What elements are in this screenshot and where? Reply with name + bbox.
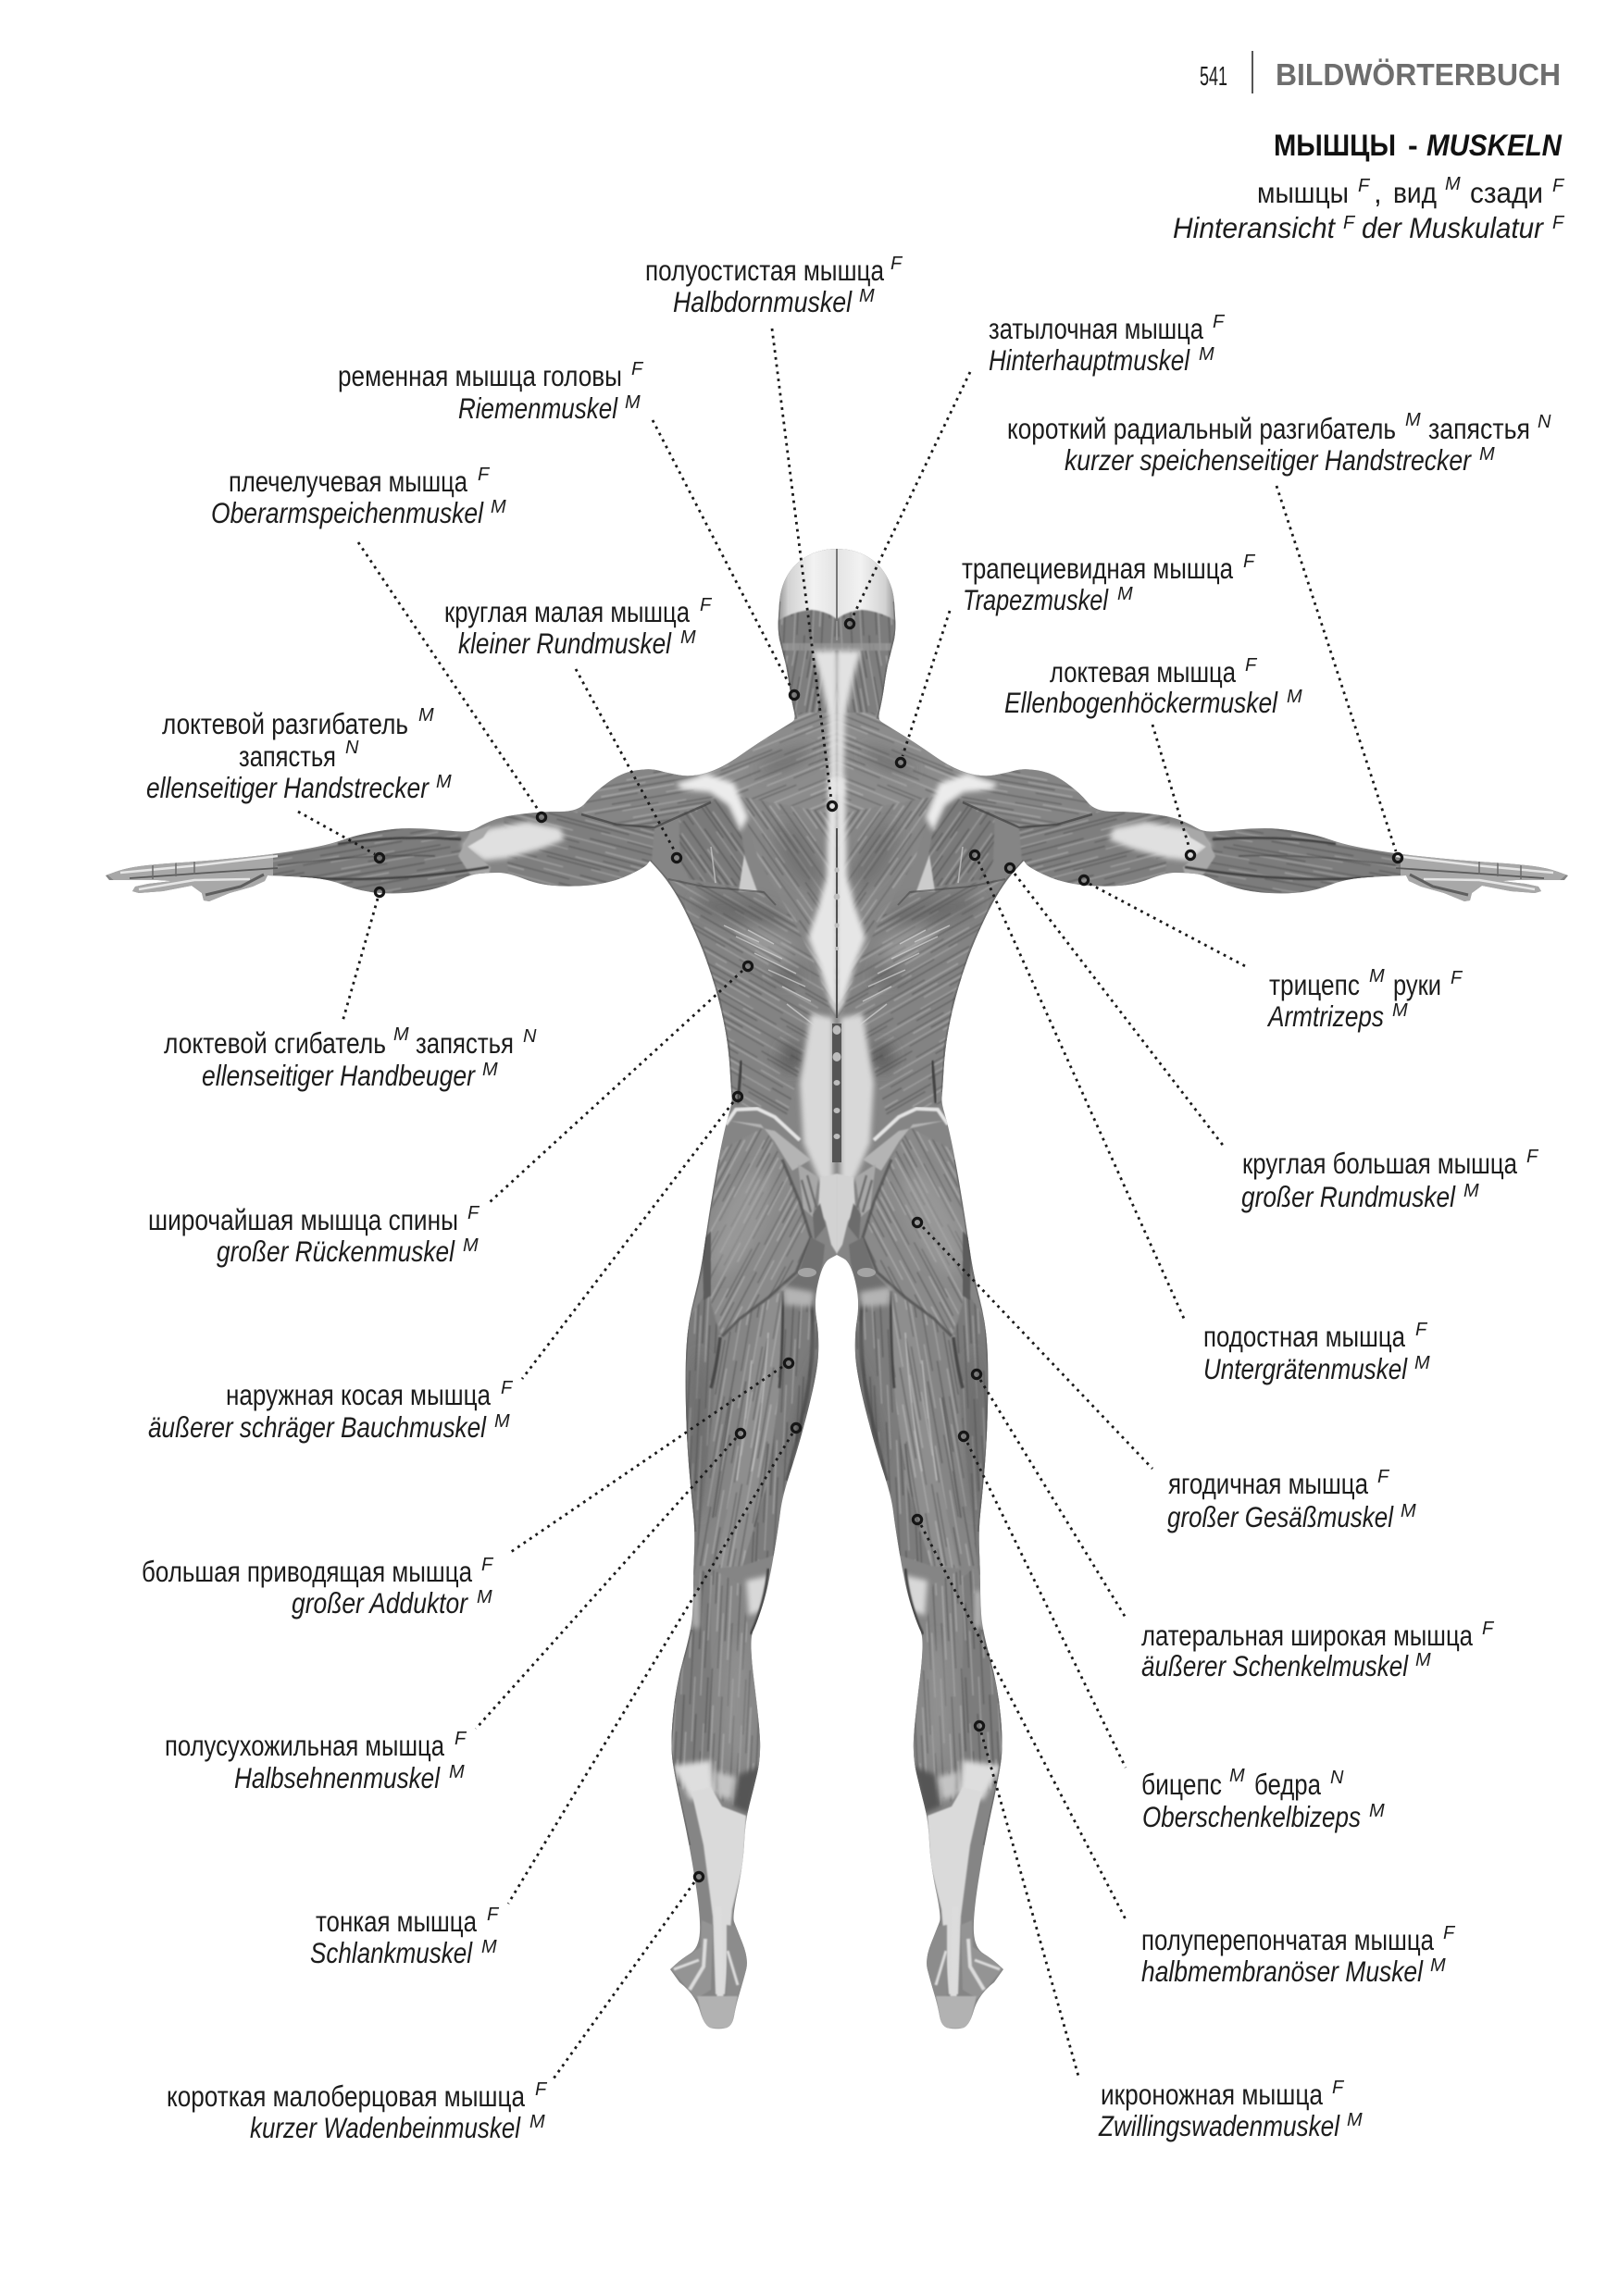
marker: трапециевидная мышца	[896, 758, 905, 767]
foot and ankle	[669, 1920, 713, 1999]
label: круглая большая мышца: großer Rundmuskel	[1241, 1180, 1456, 1213]
spine line	[836, 828, 838, 1018]
vastus lateralis	[685, 1291, 720, 1575]
header divider	[1252, 51, 1253, 93]
neck	[782, 651, 838, 743]
label: полуперепончатая мышца: F	[1443, 1923, 1456, 1943]
label: подостная мышца	[1203, 1320, 1430, 1385]
label: большая приводящая мышца: F	[481, 1555, 494, 1575]
label: ременная мышца головы: Riemenmuskel	[458, 391, 618, 425]
marker: локтевой сгибатель запястья	[375, 887, 384, 897]
label: круглая малая мышца: круглая малая мышца	[444, 595, 690, 628]
vertebral column	[832, 1024, 838, 1162]
pointer: тонкая мышца	[508, 1433, 792, 1904]
subtitle: ,	[1374, 176, 1382, 209]
label: локтевой сгибатель запястья: ellenseitiger Handbeuger	[202, 1059, 476, 1092]
subtitle: F	[1552, 213, 1565, 233]
label: локтевой разгибатель запястья: локтевой разгибатель	[162, 707, 408, 740]
hamstring origin highlight	[782, 1286, 814, 1307]
pointer: ременная мышца головы	[653, 420, 791, 689]
label: тонкая мышца: M	[481, 1937, 497, 1957]
label: наружная косая мышца: наружная косая мышца	[226, 1378, 491, 1411]
label: трицепс руки: M	[1369, 966, 1385, 987]
pointer: локтевой разгибатель запястья	[298, 812, 375, 854]
marker: короткий радиальный разгибатель	[1393, 853, 1402, 863]
label: локтевой сгибатель запястья: N	[523, 1026, 537, 1047]
pointer: наружная косая мышца	[522, 1102, 733, 1379]
pointer: короткая малоберцовая мышца	[554, 1882, 694, 2079]
label: латеральная широкая мышца	[1141, 1619, 1495, 1682]
label: ременная мышца головы: M	[625, 392, 641, 413]
calf outer head	[666, 1569, 711, 1795]
tonal shading	[691, 742, 832, 1768]
label: локтевой разгибатель запястья: ellenseitiger Handstrecker	[146, 771, 430, 804]
label: латеральная широкая мышца: латеральная широкая мышца	[1141, 1619, 1473, 1652]
label: икроножная мышца: икроножная мышца	[1101, 2078, 1323, 2111]
hand	[102, 851, 273, 903]
pointer: полуостистая мышца	[772, 329, 831, 800]
label: локтевая мышца: локтевая мышца	[1050, 655, 1236, 689]
head: occipital muscle band	[776, 610, 837, 651]
label: трапециевидная мышца: Trapezmuskel	[963, 583, 1109, 616]
label: короткий радиальный разгибатель запястья: M	[1405, 410, 1421, 430]
pointer: короткий радиальный разгибатель	[1277, 486, 1396, 851]
label: круглая малая мышца: M	[680, 627, 696, 648]
label: тонкая мышца: Schlankmuskel	[310, 1936, 473, 1969]
label: бицепс бедра: M	[1369, 1801, 1385, 1821]
label: тонкая мышца: тонкая мышца	[316, 1905, 477, 1938]
label: круглая малая мышца: kleiner Rundmuskel	[458, 627, 672, 660]
label: трицепс руки: F	[1451, 968, 1463, 988]
gluteal borders	[722, 1160, 811, 1336]
oblique groove	[738, 1061, 741, 1103]
semitendinosus	[715, 1290, 783, 1569]
latissimus dorsi	[666, 879, 830, 1115]
pointer: круглая малая мышца	[576, 669, 675, 851]
label: короткий радиальный разгибатель запястья: kurzer speichenseitiger Handstrecker	[1065, 443, 1472, 477]
subtitle: F	[1552, 176, 1565, 196]
label: ременная мышца головы: ременная мышца головы	[338, 359, 622, 392]
label: короткий радиальный разгибатель запястья: N	[1538, 412, 1551, 432]
calf shading	[672, 1760, 761, 1814]
label: короткий радиальный разгибатель запястья	[1007, 410, 1551, 477]
label: тонкая мышца: F	[487, 1905, 500, 1925]
label: короткий радиальный разгибатель запястья: запястья	[1428, 412, 1530, 445]
marker: плечелучевая мышца	[537, 813, 546, 822]
label: полуостистая мышца	[645, 254, 903, 318]
infraspinatus and teres	[679, 798, 745, 887]
marker: полуперепончатая мышца	[913, 1515, 922, 1524]
pointer: трапециевидная мышца	[903, 611, 950, 756]
subtitle: der Muskulatur	[1362, 211, 1544, 244]
pointer: локтевой сгибатель запястья	[342, 899, 378, 1022]
marker: широчайшая мышца спины	[743, 962, 753, 971]
outer hip strip	[703, 1231, 711, 1300]
pointer: ягодичная мышца	[923, 1227, 1152, 1469]
label: икроножная мышца: M	[1347, 2110, 1363, 2130]
label: ягодичная мышца: großer Gesäßmuskel	[1167, 1500, 1394, 1533]
label: ягодичная мышца: M	[1401, 1501, 1416, 1521]
label: короткая малоберцовая мышца: короткая малоберцовая мышца	[167, 2079, 525, 2113]
neck central tendon	[813, 651, 838, 796]
marker: латеральная широкая мышца	[972, 1370, 981, 1379]
label: плечелучевая мышца: Oberarmspeichenmuskel	[211, 496, 484, 529]
label: большая приводящая мышца	[142, 1555, 494, 1620]
label: подостная мышца: подостная мышца	[1203, 1320, 1405, 1353]
label: икроножная мышца	[1098, 2078, 1363, 2142]
sacrum	[798, 1164, 838, 1255]
label: локтевая мышца: M	[1287, 687, 1302, 707]
label: локтевой разгибатель запястья: M	[418, 705, 434, 726]
label: большая приводящая мышца: M	[477, 1587, 492, 1607]
label: полусухожильная мышца: Halbsehnenmuskel	[234, 1761, 441, 1794]
trapezius upper	[690, 713, 837, 825]
label: затылочная мышца: Hinterhauptmuskel	[989, 343, 1190, 377]
subtitle: Hinteransicht	[1173, 211, 1336, 244]
label: короткий радиальный разгибатель запястья: короткий радиальный разгибатель	[1007, 412, 1396, 445]
marker: ягодичная мышца	[913, 1218, 922, 1227]
section heading: Bildwörterbuch: BILDWÖRTERBUCH	[1276, 57, 1561, 92]
label: трицепс руки: Armtrizeps	[1266, 999, 1384, 1033]
marker: локтевая мышца	[1186, 850, 1195, 860]
label: полуперепончатая мышца: halbmembranöser Muskel	[1141, 1955, 1424, 1988]
marker: икроножная мышца	[975, 1721, 984, 1731]
label: затылочная мышца: M	[1199, 344, 1214, 365]
label: круглая большая мышца: F	[1526, 1147, 1539, 1167]
label: локтевой разгибатель запястья	[146, 705, 452, 804]
label: локтевая мышца: F	[1245, 655, 1258, 676]
label: полуперепончатая мышца	[1141, 1923, 1456, 1988]
label: полуостистая мышца: M	[859, 286, 875, 306]
label: полусухожильная мышца: полусухожильная мышца	[165, 1729, 444, 1762]
label: плечелучевая мышца: плечелучевая мышца	[229, 465, 467, 498]
left half of body	[93, 537, 842, 2045]
label: круглая малая мышца	[444, 595, 713, 660]
lumbar fascia	[800, 1013, 833, 1185]
label: ягодичная мышца	[1167, 1467, 1416, 1533]
pointer: круглая большая мышца	[1015, 874, 1225, 1148]
anatomical figure: rear view of human musculature	[93, 537, 1581, 2045]
inner thigh	[742, 1290, 820, 1566]
marker: трицепс руки	[1079, 875, 1089, 885]
label: бицепс бедра: бедра	[1254, 1768, 1321, 1801]
label: полусухожильная мышца: F	[455, 1729, 467, 1749]
marker: ременная мышца головы	[790, 690, 799, 700]
label: трапециевидная мышца: F	[1243, 552, 1256, 572]
label: круглая малая мышца: F	[700, 595, 713, 615]
marker: бицепс бедра	[959, 1432, 968, 1441]
heel	[697, 1996, 738, 2029]
label: латеральная широкая мышца: F	[1482, 1619, 1495, 1639]
label: локтевой сгибатель запястья	[164, 1024, 537, 1092]
label: короткая малоберцовая мышца	[167, 2079, 548, 2144]
label: полуперепончатая мышца: полуперепончатая мышца	[1141, 1923, 1434, 1956]
label: наружная косая мышца	[148, 1378, 514, 1444]
page number: 541	[1200, 62, 1227, 92]
subtitle: F	[1358, 176, 1371, 196]
label: затылочная мышца: затылочная мышца	[989, 312, 1203, 345]
ischial region	[782, 1237, 825, 1301]
spine light wedge	[808, 777, 838, 1018]
triceps	[504, 812, 654, 887]
label: трицепс руки: M	[1392, 1000, 1408, 1021]
pointer: затылочная мышца	[853, 372, 970, 617]
label: наружная косая мышца: M	[494, 1411, 510, 1432]
label: трицепс руки: руки	[1393, 968, 1441, 1001]
label: короткая малоберцовая мышца: kurzer Wadenbeinmuskel	[250, 2111, 521, 2144]
label: локтевой разгибатель запястья: M	[436, 772, 452, 792]
label: широчайшая мышца спины: F	[467, 1203, 480, 1223]
label: локтевой сгибатель запястья: M	[393, 1024, 409, 1045]
marker: полуостистая мышца	[828, 801, 837, 811]
label: полусухожильная мышца: M	[449, 1762, 465, 1782]
Achilles tendon	[691, 1787, 746, 1994]
label: икроножная мышца: F	[1332, 2078, 1345, 2098]
label: большая приводящая мышца: большая приводящая мышца	[142, 1555, 472, 1588]
calf inner head	[711, 1569, 763, 1808]
label: ременная мышца головы	[338, 359, 644, 425]
label: трицепс руки: трицепс	[1269, 968, 1360, 1001]
label: широчайшая мышца спины: großer Rückenmuskel	[217, 1235, 455, 1268]
rhomboid window	[739, 855, 757, 891]
pointer: трицепс руки	[1090, 884, 1249, 968]
label: большая приводящая мышца: großer Adduktor	[292, 1586, 468, 1620]
label: короткий радиальный разгибатель запястья: M	[1479, 444, 1495, 465]
label: латеральная широкая мышца: äußerer Schenkelmuskel	[1141, 1649, 1409, 1682]
deltoid	[579, 768, 715, 827]
label: локтевой сгибатель запястья: локтевой сгибатель	[164, 1026, 386, 1060]
label: круглая большая мышца: круглая большая мышца	[1242, 1147, 1517, 1180]
subtitle: мышцы	[1257, 176, 1349, 209]
label: бицепс бедра: Oberschenkelbizeps	[1142, 1800, 1361, 1833]
label: подостная мышца: Untergrätenmuskel	[1203, 1352, 1408, 1385]
elbow	[458, 825, 491, 875]
gluteus maximus	[708, 1127, 811, 1336]
pointer: икроножная мышца	[981, 1732, 1079, 2079]
pointer: большая приводящая мышца	[508, 1367, 782, 1554]
label: широчайшая мышца спины: M	[463, 1235, 479, 1256]
knee tendons	[693, 1575, 770, 1629]
forearm grooves	[278, 838, 489, 879]
label: затылочная мышца: F	[1213, 312, 1226, 332]
label: широчайшая мышца спины	[148, 1203, 480, 1268]
label: бицепс бедра: N	[1330, 1768, 1344, 1788]
label: плечелучевая мышца	[211, 465, 506, 529]
marker: подостная мышца	[970, 850, 979, 860]
label: тонкая мышца	[310, 1905, 500, 1969]
scapular detail lines	[581, 802, 776, 905]
label: ягодичная мышца: ягодичная мышца	[1168, 1467, 1368, 1500]
pointer: полусухожильная мышца	[476, 1438, 736, 1729]
label: круглая большая мышца	[1241, 1147, 1539, 1213]
label: подостная мышца: F	[1415, 1320, 1428, 1340]
pointer: широчайшая мышца спины	[490, 971, 742, 1202]
label: локтевой сгибатель запястья: M	[482, 1060, 498, 1080]
marker: большая приводящая мышца	[784, 1359, 793, 1368]
label: латеральная широкая мышца: M	[1415, 1650, 1431, 1670]
label: икроножная мышца: Zwillingswadenmuskel	[1098, 2109, 1340, 2142]
label: полуостистая мышца: F	[890, 254, 903, 274]
head: skull	[778, 549, 837, 640]
subtitle: F	[1343, 213, 1356, 233]
label: локтевой сгибатель запястья: запястья	[416, 1026, 514, 1060]
label: подостная мышца: M	[1414, 1353, 1430, 1373]
label: короткая малоберцовая мышца: M	[529, 2112, 545, 2132]
label: ягодичная мышца: F	[1377, 1467, 1390, 1487]
pointer: полуперепончатая мышца	[921, 1525, 1126, 1919]
biceps femoris	[696, 1303, 764, 1566]
title	[1274, 129, 1563, 162]
label: плечелучевая мышца: F	[478, 465, 491, 485]
label: бицепс бедра: бицепс	[1141, 1768, 1222, 1801]
label: широчайшая мышца спины: широчайшая мышца спины	[148, 1203, 458, 1236]
muscle layers	[268, 610, 838, 1808]
marker: затылочная мышца	[845, 619, 854, 628]
title: МЫШЦЫ	[1274, 129, 1396, 162]
label: локтевой разгибатель запястья: запястья	[239, 739, 336, 773]
label: полусухожильная мышца	[165, 1729, 467, 1794]
label: короткая малоберцовая мышца: F	[535, 2079, 548, 2100]
marker: наружная косая мышца	[733, 1092, 742, 1101]
edge shading	[650, 602, 796, 1845]
label: плечелучевая мышца: M	[491, 497, 506, 517]
scapular spine highlight	[676, 774, 748, 831]
label: бицепс бедра	[1141, 1766, 1385, 1833]
label: затылочная мышца	[989, 312, 1226, 377]
label: полуостистая мышца: полуостистая мышца	[645, 254, 884, 287]
label: круглая большая мышца: M	[1463, 1181, 1479, 1201]
subtitle	[1173, 174, 1565, 244]
latissimus light streaks	[724, 925, 815, 1025]
pointer: локтевая мышца	[1152, 725, 1189, 849]
subtitle: вид	[1393, 176, 1437, 209]
forearm	[268, 828, 481, 894]
marker: короткая малоберцовая мышца	[694, 1872, 704, 1881]
label: трапециевидная мышца: трапециевидная мышца	[962, 552, 1233, 585]
label: локтевая мышца	[1004, 655, 1302, 719]
marker: круглая большая мышца	[1005, 863, 1015, 873]
label: наружная косая мышца: F	[501, 1378, 514, 1398]
label: наружная косая мышца: äußerer schräger Bauchmuskel	[148, 1410, 487, 1444]
pointer: бицепс бедра	[967, 1443, 1126, 1768]
label: трапециевидная мышца	[962, 552, 1256, 616]
label: трицепс руки	[1266, 966, 1463, 1033]
marker: локтевой разгибатель запястья	[375, 853, 384, 863]
label: бицепс бедра: M	[1229, 1766, 1245, 1786]
pointer: латеральная широкая мышца	[980, 1380, 1126, 1618]
subtitle: M	[1445, 174, 1461, 194]
pelvic wedge	[729, 1121, 811, 1171]
label: локтевая мышца: Ellenbogenhöckermuskel	[1004, 686, 1278, 719]
label: полуостистая мышца: Halbdornmuskel	[673, 285, 853, 318]
marker: круглая малая мышца	[672, 853, 681, 863]
subtitle: сзади	[1470, 176, 1543, 209]
label: ременная мышца головы: F	[631, 359, 644, 379]
marker: тонкая мышца	[791, 1423, 801, 1433]
label: полуперепончатая мышца: M	[1430, 1955, 1446, 1976]
pointer: подостная мышца	[978, 862, 1185, 1321]
label: трапециевидная мышца: M	[1117, 584, 1133, 604]
title: -	[1408, 129, 1418, 162]
pointer: плечелучевая мышца	[358, 542, 539, 811]
right half of body (mirror)	[831, 537, 1581, 2045]
marker: полусухожильная мышца	[736, 1429, 745, 1438]
thigh grooves and strands	[711, 1291, 814, 1527]
iliac crest	[726, 1109, 800, 1140]
label: локтевой разгибатель запястья: N	[345, 738, 359, 758]
trapezius lower	[741, 799, 933, 824]
title: MUSKELN	[1426, 129, 1563, 162]
triceps tendon	[461, 822, 565, 861]
